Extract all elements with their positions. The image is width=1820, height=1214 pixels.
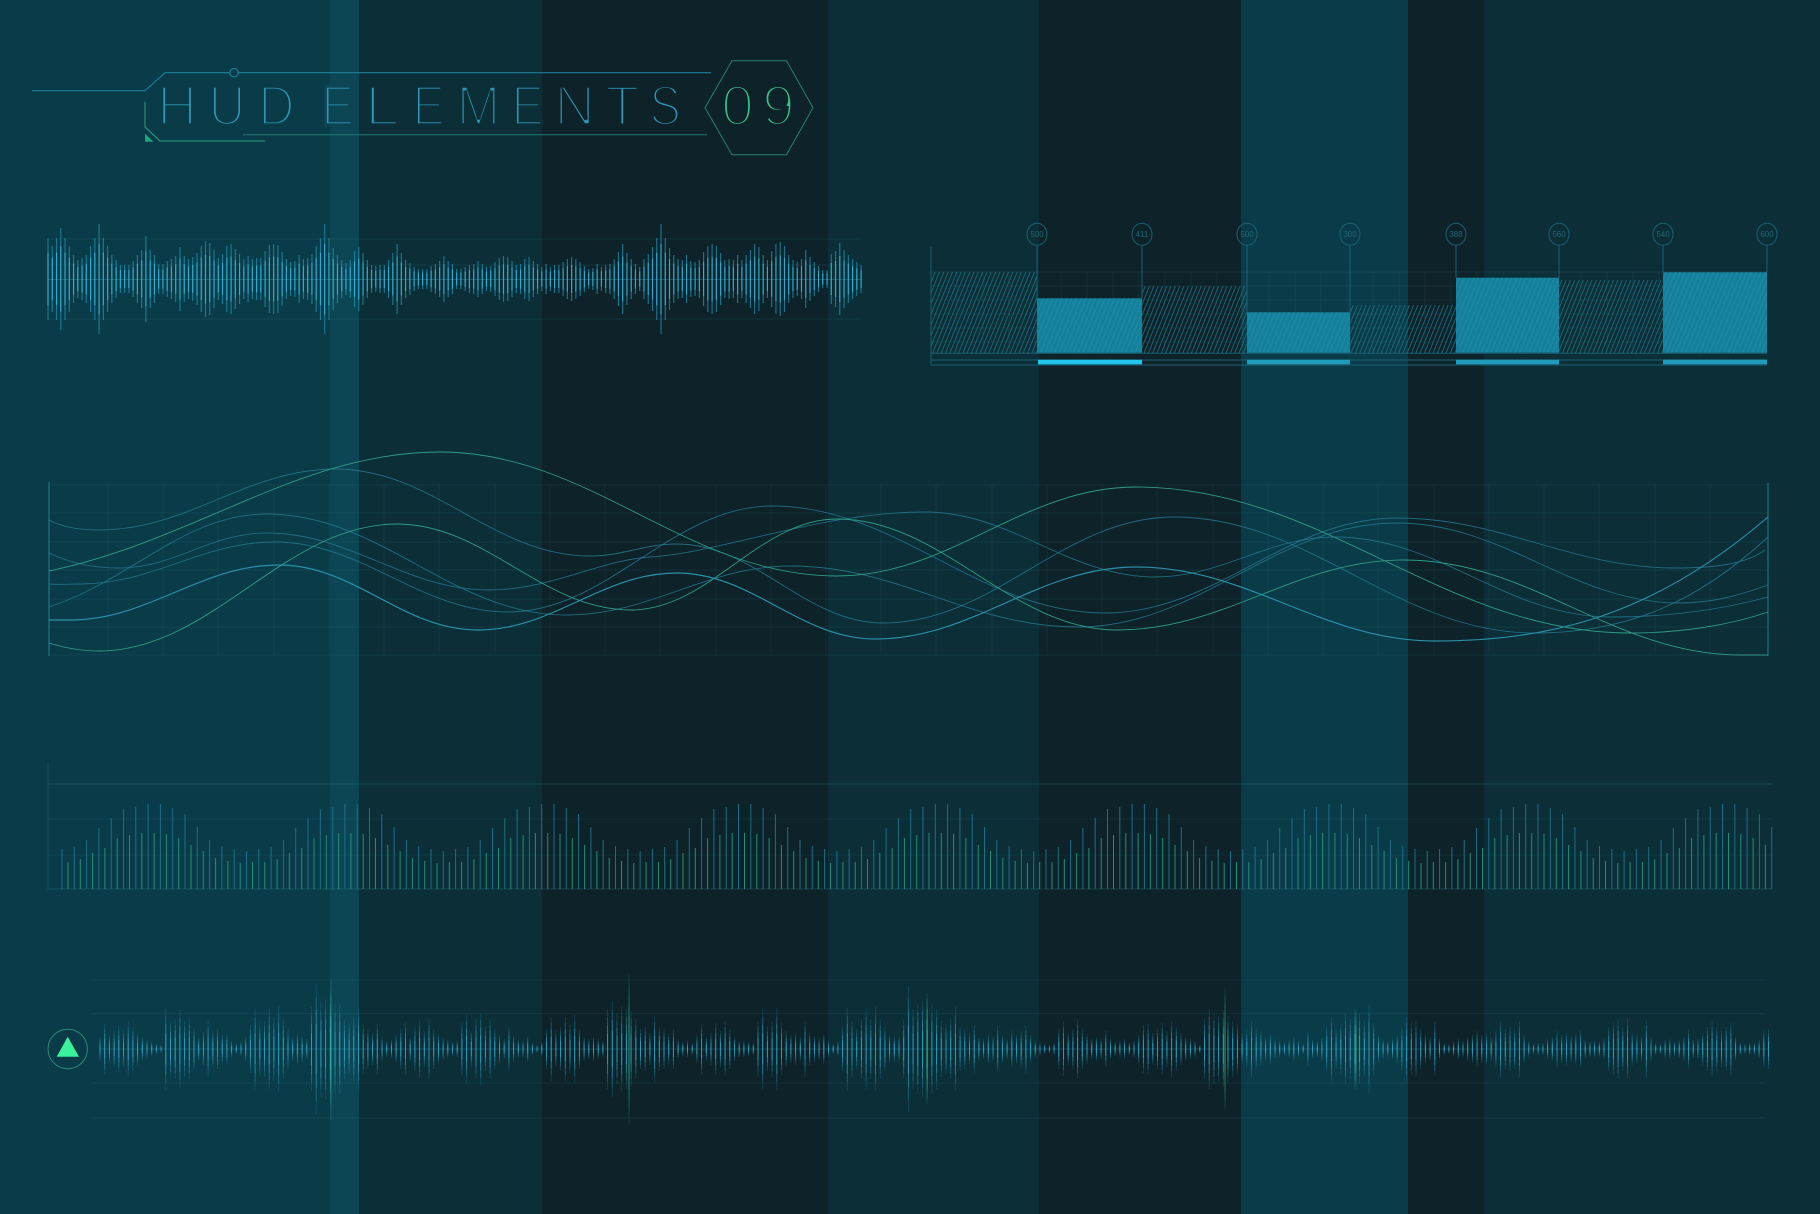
marker numbers: 388 — [1449, 230, 1463, 239]
bar chart: top right — [931, 223, 1777, 365]
heading text: E — [512, 74, 544, 138]
inner bright waveform bars — [48, 244, 861, 314]
heading text: U — [208, 75, 246, 138]
value markers — [1027, 223, 1777, 245]
heading text: H — [157, 73, 197, 137]
solid blue bars — [1037, 272, 1767, 353]
heading text: T — [605, 73, 639, 137]
hexagon badge with number 09 — [705, 61, 813, 155]
heading text — [157, 73, 681, 138]
thin teal curves — [49, 469, 1768, 633]
marker numbers — [1030, 230, 1774, 239]
axis and pin lines — [931, 245, 1767, 365]
green bars — [68, 833, 1820, 889]
hexagon badge with number 09: 0 — [721, 74, 754, 138]
vertical bar chart: repeating peaks — [48, 762, 1820, 889]
marker numbers: 540 — [1656, 230, 1670, 239]
hatched bars — [931, 272, 1663, 353]
fading waveform bars — [100, 984, 1768, 1114]
title frame lines — [32, 68, 711, 142]
heading text: M — [457, 73, 500, 137]
chart grid — [931, 272, 1767, 353]
marker numbers: 500 — [1240, 230, 1254, 239]
waveform chart: top left — [48, 224, 861, 334]
marker numbers: 411 — [1136, 230, 1149, 239]
legend strips — [1038, 360, 1767, 364]
heading text: E — [322, 74, 354, 138]
green spikes — [330, 974, 1356, 1124]
blue bars — [62, 804, 1820, 889]
outer waveform bars — [48, 224, 861, 334]
heading text: E — [412, 74, 445, 138]
heading text: D — [258, 74, 295, 138]
marker numbers: 300 — [1343, 230, 1357, 239]
marker numbers: 600 — [1760, 230, 1774, 239]
curve chart grid — [49, 485, 1768, 655]
bright teal curve — [49, 517, 1768, 641]
marker numbers: 500 — [1030, 230, 1044, 239]
heading text: L — [365, 74, 400, 137]
hexagon badge with number 09: 9 — [762, 74, 795, 138]
green curves — [49, 452, 1768, 655]
icon: play triangle in circle — [48, 1029, 87, 1069]
audio waveform with play button — [48, 974, 1768, 1124]
line chart: overlapping curves — [49, 452, 1768, 656]
heading text: S — [649, 75, 681, 138]
heading text: N — [554, 75, 595, 138]
title block: HUD ELEMENTS 09 — [32, 61, 813, 155]
marker numbers: 560 — [1552, 230, 1566, 239]
chart side axes — [49, 482, 1768, 656]
